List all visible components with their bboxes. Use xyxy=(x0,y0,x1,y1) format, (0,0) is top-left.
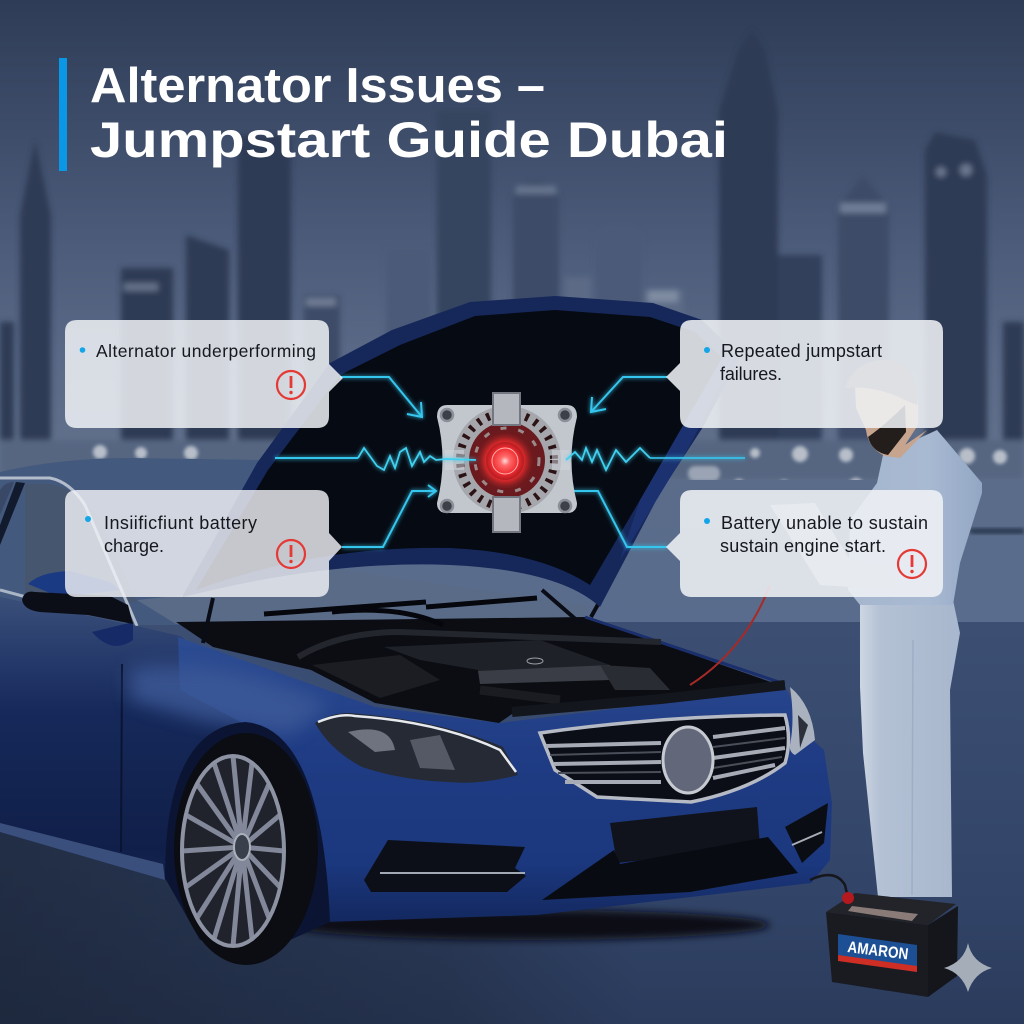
car: lower grille xyxy=(542,837,798,900)
icon: warning xyxy=(898,550,926,578)
car: door panels xyxy=(0,597,320,920)
car: grille emblem xyxy=(663,727,713,793)
callout: repeated jumpstart failures xyxy=(666,320,943,428)
circuit lines xyxy=(275,377,745,547)
red cable from engine to tablet xyxy=(690,585,770,685)
alternator: side straps xyxy=(445,450,570,470)
sparkle watermark xyxy=(944,943,992,992)
mechanic: hair xyxy=(845,360,917,405)
mechanic: legs xyxy=(860,600,960,897)
car: grille xyxy=(540,715,788,802)
city lights xyxy=(93,445,1007,503)
callout: battery unable to sustain engine start: sustain engine start. xyxy=(720,536,886,556)
battery: red terminal xyxy=(842,892,854,904)
battery: cable xyxy=(810,875,848,898)
callout: repeated jumpstart failures: failures. xyxy=(720,364,782,384)
battery xyxy=(810,875,958,997)
mechanic: beard xyxy=(868,405,906,455)
callout: alternator underperforming xyxy=(65,320,343,428)
car: right headlight xyxy=(790,687,815,755)
car: cowl hose xyxy=(298,632,661,657)
battery: label: AMARON xyxy=(847,939,909,963)
battery: side face xyxy=(928,906,958,997)
mechanic: torso xyxy=(848,430,982,605)
background: city skyline at dusk xyxy=(0,0,1024,520)
alternator: body plate xyxy=(437,405,577,513)
car: headlight xyxy=(315,713,518,783)
ground: water and asphalt xyxy=(0,480,1024,1024)
callout: battery unable to sustain engine start: Battery unable to sustain xyxy=(721,513,928,533)
battery: label xyxy=(838,934,917,972)
car: engine bay xyxy=(176,617,785,723)
car: hood struts xyxy=(203,590,606,643)
battery: top xyxy=(826,893,956,925)
waveforms xyxy=(358,448,650,470)
alternator: bolt holes xyxy=(441,409,571,512)
car: front bumper and hood lip xyxy=(178,637,832,922)
car: lower intake xyxy=(364,840,526,892)
mechanic xyxy=(770,360,982,897)
car: roof and side windows xyxy=(0,458,260,625)
callout: insufficient battery charge xyxy=(65,490,342,597)
car: rear wheel xyxy=(174,733,318,965)
car: windscreen area under hood xyxy=(137,568,590,624)
car: engine cover xyxy=(384,640,610,682)
car body xyxy=(0,458,832,965)
car: wipers xyxy=(264,598,537,625)
mechanic: tablet and hands xyxy=(770,503,895,590)
alternator xyxy=(437,393,577,532)
callout: insufficient battery charge: Insiificfiunt battery xyxy=(104,513,257,533)
icon: warning xyxy=(277,371,305,399)
callout: insufficient battery charge: charge. xyxy=(104,536,164,556)
alternator: slotted ring xyxy=(453,406,561,514)
car: fender highlight xyxy=(130,665,330,735)
battery: front face xyxy=(826,912,928,997)
title block: Jumpstart Guide Dubai xyxy=(90,112,728,168)
open hood xyxy=(183,296,740,607)
car: licence plate xyxy=(610,807,760,863)
car: side mirror xyxy=(22,571,133,646)
callout: repeated jumpstart failures: Repeated jumpstart xyxy=(721,341,882,361)
callout: alternator underperforming: Alternator underperforming xyxy=(96,341,316,361)
car: wheel arch xyxy=(165,722,330,940)
car: under-car shadow xyxy=(290,910,770,940)
alternator: red glowing core xyxy=(483,439,527,483)
car: right intake xyxy=(785,803,828,863)
callout: battery unable to sustain engine start xyxy=(666,490,943,597)
mechanic: head and neck xyxy=(855,367,927,458)
icon: warning xyxy=(277,540,305,568)
title block: Alternator Issues – xyxy=(90,59,545,113)
alternator: top and bottom brackets xyxy=(493,393,520,532)
title block xyxy=(59,58,728,171)
